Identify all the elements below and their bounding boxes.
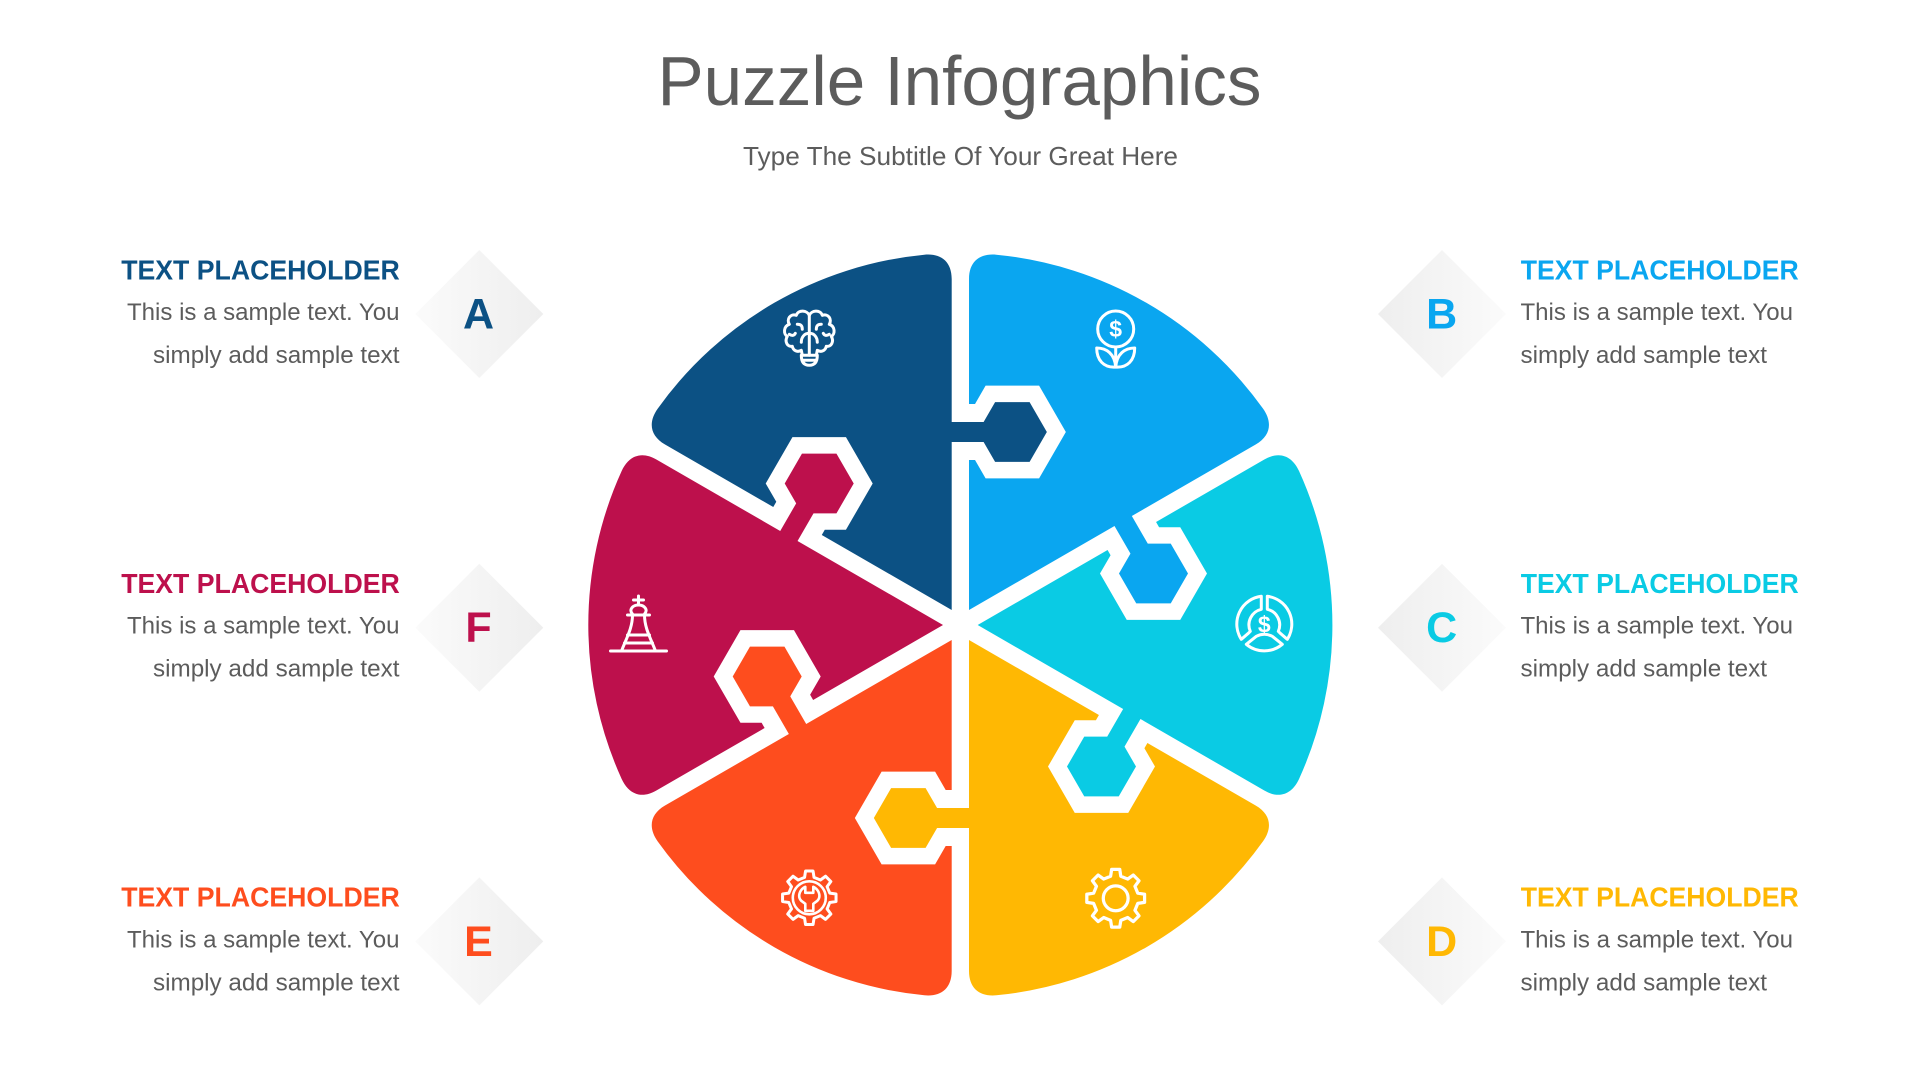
- badge E: [415, 877, 543, 1005]
- icon: money flower: $: [1109, 316, 1122, 342]
- puzzle piece F: [485, 365, 991, 885]
- badge F: F: [465, 604, 492, 652]
- text block A: simply add sample text: [153, 342, 400, 369]
- text block A: This is a sample text. You: [127, 299, 400, 326]
- text block C: [1520, 613, 1793, 683]
- icon: dollar segmented ring: $: [1258, 611, 1271, 637]
- subtitle: Type The Subtitle Of Your Great Here: [743, 141, 1178, 171]
- text block F: [127, 613, 400, 683]
- text block D: simply add sample text: [1520, 969, 1767, 996]
- puzzle piece A: [652, 255, 1047, 610]
- text block F: This is a sample text. You: [127, 613, 400, 640]
- text block E: simply add sample text: [153, 969, 400, 996]
- text block E: [127, 926, 400, 996]
- badge C: [1378, 564, 1506, 692]
- puzzle wheel: [485, 172, 1436, 1078]
- title: Puzzle Infographics: [658, 42, 1262, 120]
- badge B: B: [1426, 290, 1457, 338]
- text block D: This is a sample text. You: [1520, 926, 1793, 953]
- heading F: TEXT PLACEHOLDER: [121, 568, 400, 599]
- icon: brain light bulb: [785, 311, 834, 365]
- text block A: [127, 299, 400, 369]
- badge E: E: [464, 918, 493, 966]
- puzzle piece C: [930, 365, 1436, 885]
- panel: C: [1378, 564, 1799, 692]
- puzzle piece E: [596, 558, 1102, 1078]
- icon: gear: [1087, 869, 1145, 927]
- icon: money flower: [1097, 311, 1135, 367]
- heading C: TEXT PLACEHOLDER: [1521, 568, 1799, 599]
- badge F: [415, 564, 543, 692]
- puzzle piece D: [874, 640, 1269, 995]
- text block D: [1520, 926, 1793, 996]
- heading A: TEXT PLACEHOLDER: [121, 254, 400, 285]
- badge B: [1378, 250, 1506, 378]
- text block C: This is a sample text. You: [1520, 613, 1793, 640]
- badge A: [415, 250, 543, 378]
- badge C: C: [1426, 604, 1457, 652]
- panel: A: [121, 250, 543, 378]
- text block C: simply add sample text: [1520, 656, 1767, 683]
- badge D: D: [1426, 918, 1457, 966]
- panel: D: [1378, 877, 1799, 1005]
- puzzle piece B: [819, 172, 1324, 692]
- heading E: TEXT PLACEHOLDER: [121, 882, 400, 913]
- text block F: simply add sample text: [153, 656, 400, 683]
- panel: E: [121, 877, 543, 1005]
- heading D: TEXT PLACEHOLDER: [1521, 882, 1799, 913]
- badge A: A: [463, 290, 494, 338]
- heading B: TEXT PLACEHOLDER: [1521, 254, 1799, 285]
- panel: B: [1378, 250, 1799, 378]
- badge D: [1378, 877, 1506, 1005]
- panel: F: [121, 564, 543, 692]
- text block B: This is a sample text. You: [1520, 299, 1793, 326]
- icon: gear with wrench: [783, 871, 836, 925]
- icon: dollar segmented ring: [1237, 596, 1292, 651]
- icon: chess king: [610, 596, 666, 651]
- text block E: This is a sample text. You: [127, 926, 400, 953]
- text block B: [1520, 299, 1793, 369]
- text block B: simply add sample text: [1520, 342, 1767, 369]
